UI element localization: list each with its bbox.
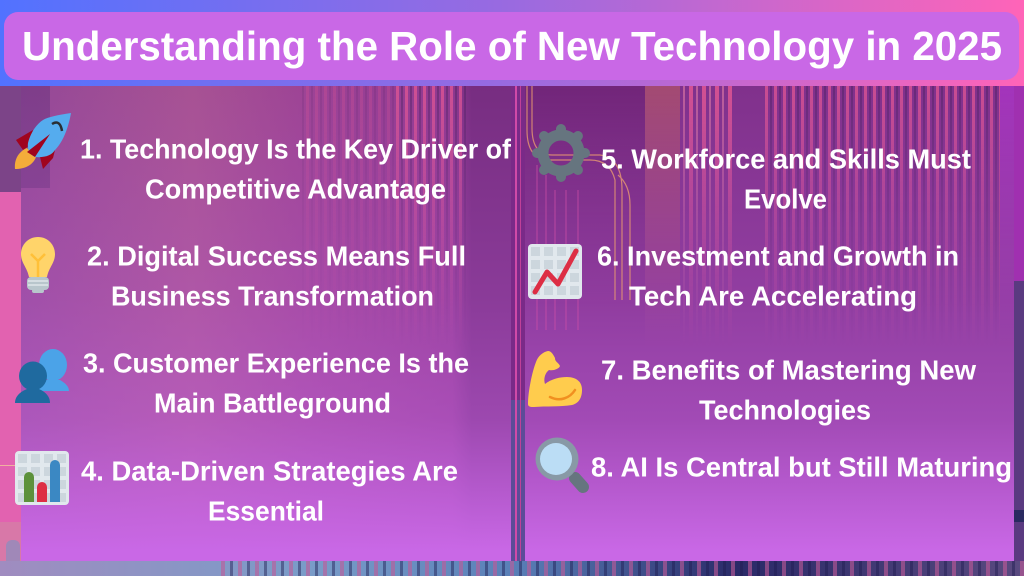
text 4: Essential [208, 496, 324, 526]
item 5 [537, 129, 971, 214]
icon: trend chart [528, 244, 582, 299]
icon: light bulb [21, 237, 55, 293]
item 3 [15, 348, 469, 418]
text 7: Technologies [699, 394, 871, 426]
item 7 [528, 351, 977, 426]
icon: bar chart [15, 451, 69, 505]
text 2: Business Transformation [111, 280, 434, 312]
panel: right [525, 86, 1014, 561]
text 5: 5. Workforce and Skills Must [601, 144, 971, 174]
icon: gear [537, 129, 585, 177]
panel: left [21, 86, 511, 561]
text 1: 1. Technology Is the Key Driver of [80, 134, 512, 164]
title: Understanding the Role of New Technology in 2025 [22, 23, 1002, 69]
text 8: 8. AI Is Central but Still Maturing [591, 452, 1012, 482]
icon: rocket [15, 113, 71, 169]
text 1: Competitive Advantage [145, 174, 446, 204]
text 5: Evolve [744, 184, 827, 214]
item 8 [536, 438, 1012, 487]
text 6: Tech Are Accelerating [629, 280, 917, 312]
text 3: Main Battleground [154, 388, 391, 418]
item 4 [15, 451, 458, 526]
title bar [4, 12, 1019, 80]
text 7: 7. Benefits of Mastering New [601, 354, 977, 386]
text 4: 4. Data-Driven Strategies Are [81, 456, 458, 486]
icon: people [15, 349, 69, 403]
icon: flexed biceps [528, 351, 582, 407]
item 6 [528, 240, 959, 312]
icon: magnifying glass [536, 438, 583, 487]
text 2: 2. Digital Success Means Full [87, 240, 466, 272]
item 2 [21, 237, 466, 312]
text 6: 6. Investment and Growth in [597, 240, 959, 272]
text 3: 3. Customer Experience Is the [83, 348, 469, 378]
item 1 [15, 113, 512, 204]
